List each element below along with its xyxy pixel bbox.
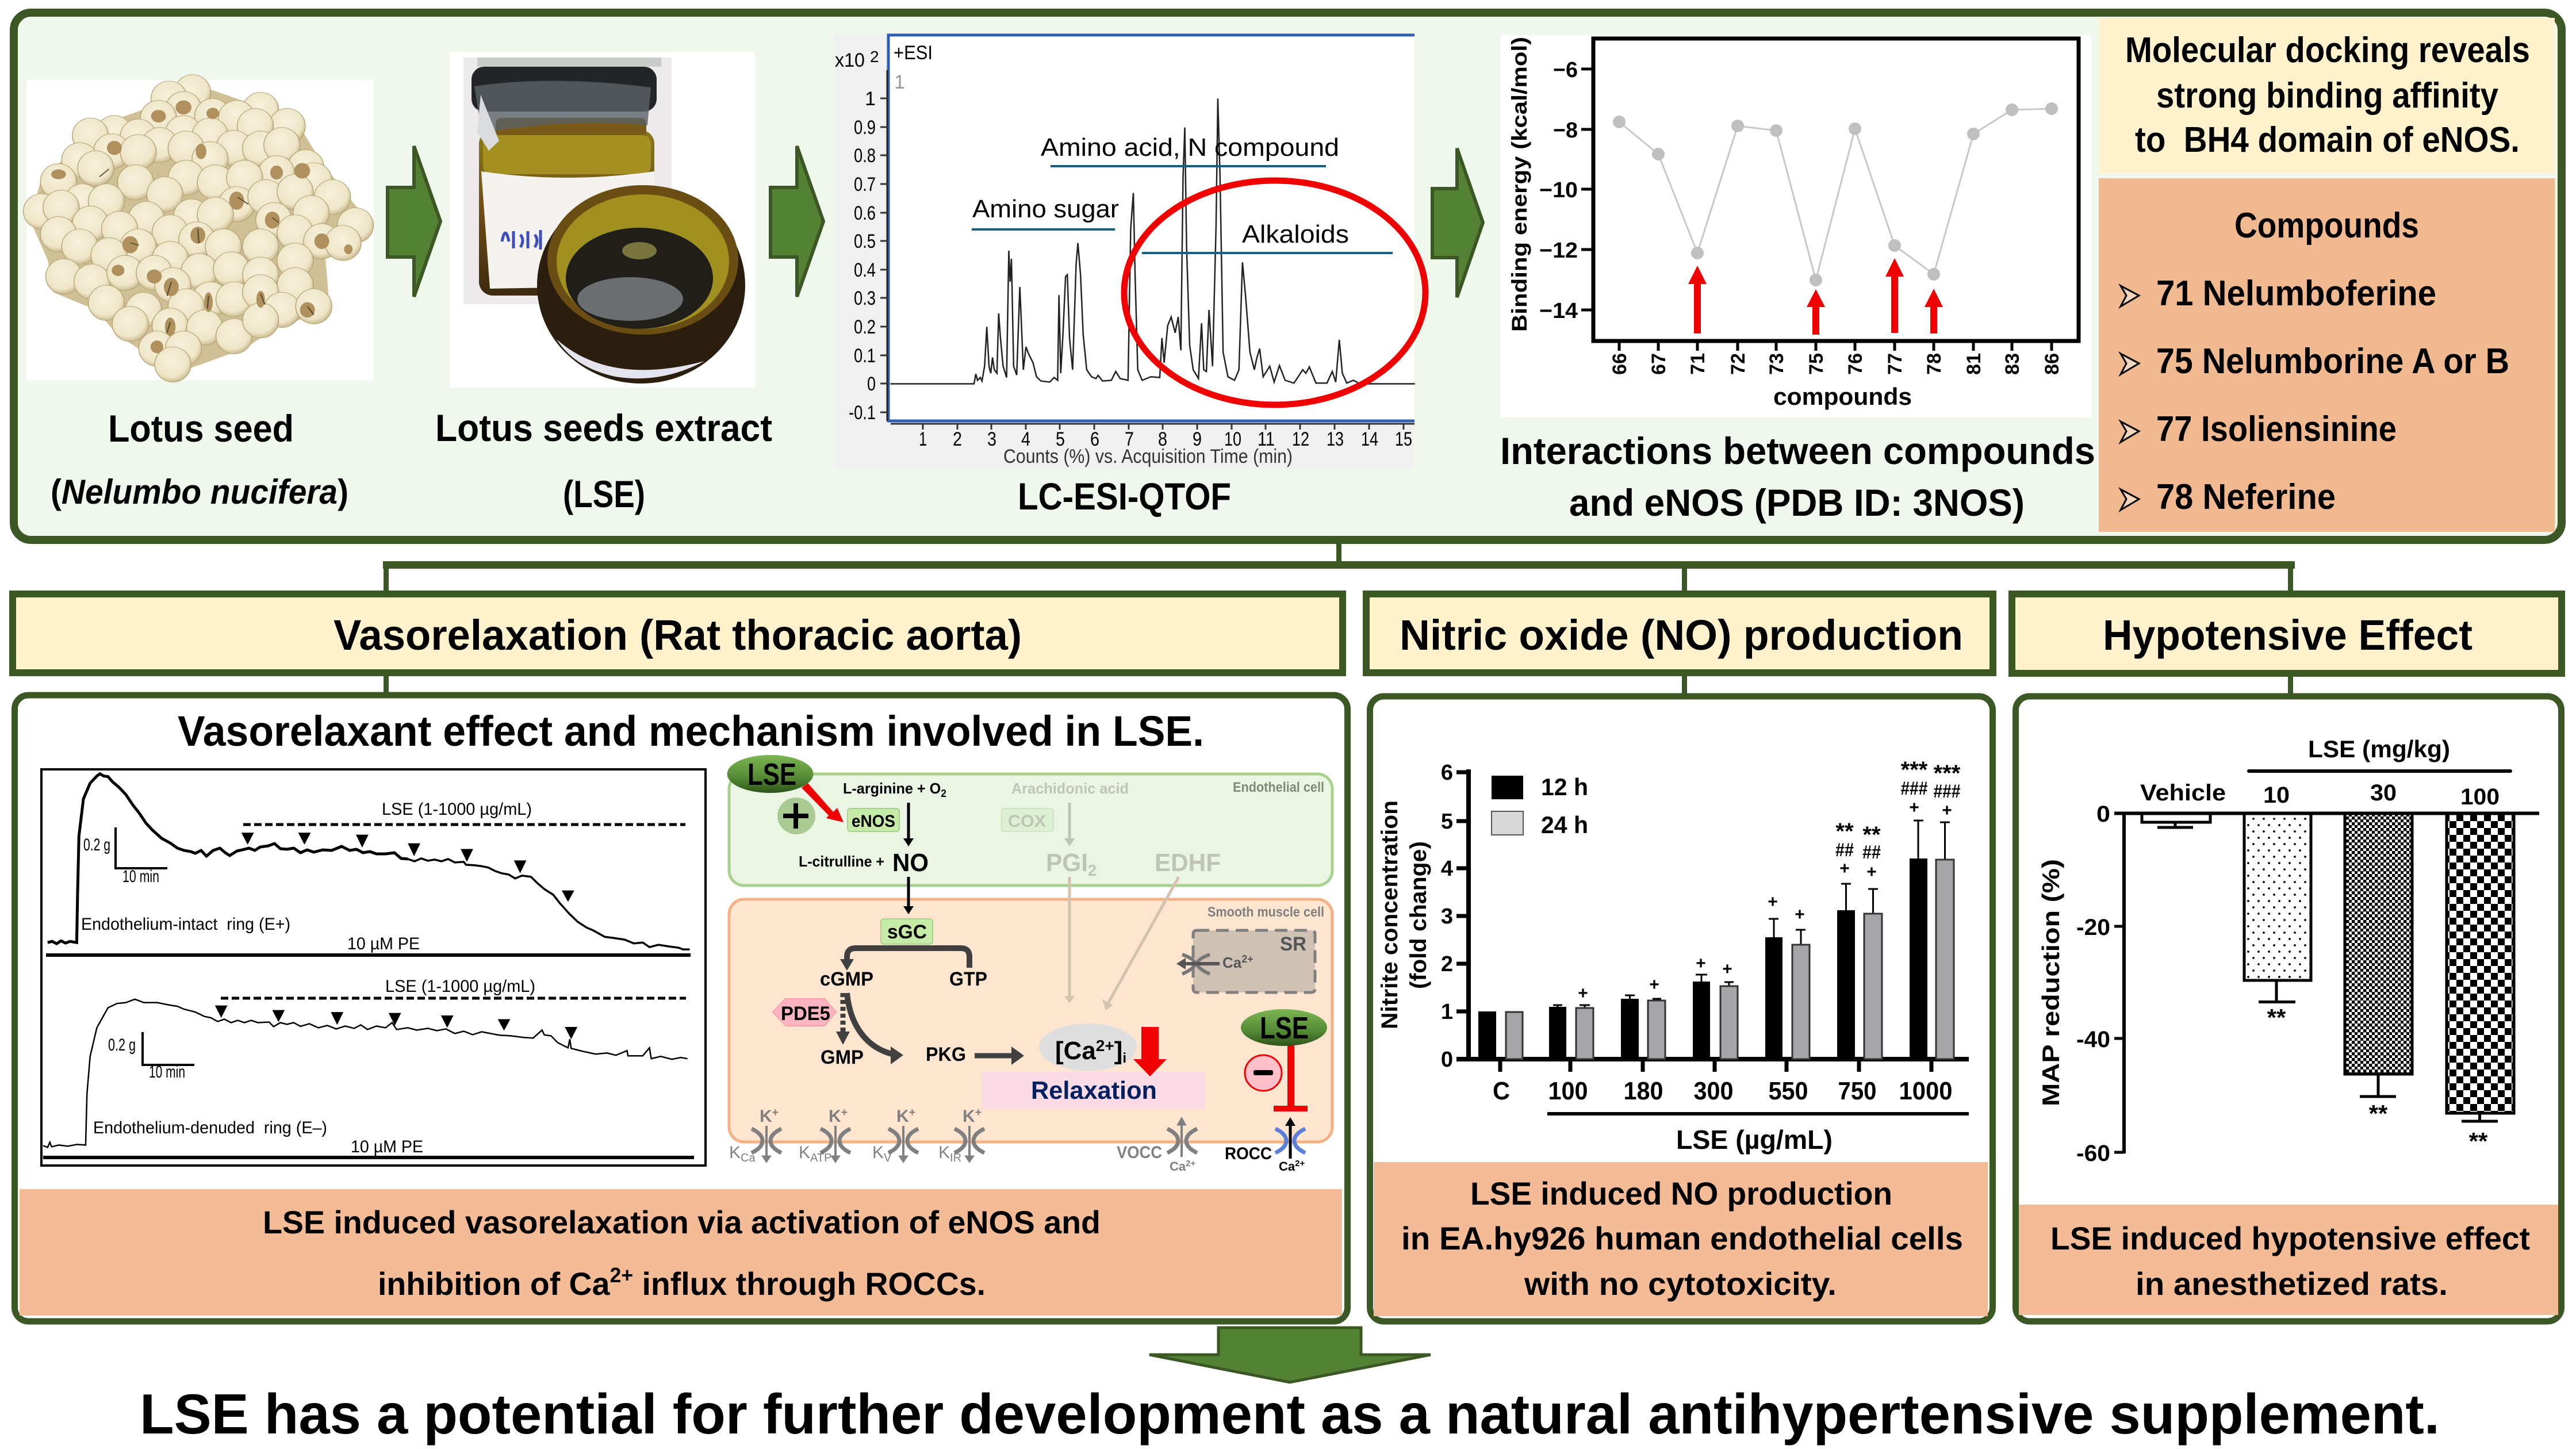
label: lotus seed: Lotus seed [108, 407, 294, 450]
chart: docking binding energy: −14 [1539, 299, 1578, 323]
chart: docking binding energy: 76 [1845, 353, 1866, 375]
heading: hypotensive effect [2012, 594, 2562, 673]
ion channels: K [896, 1107, 909, 1126]
conclusion: hypotensive effect: in anesthetized rats. [2136, 1266, 2448, 1302]
pathway: NO: L-citrulline + [799, 853, 884, 870]
chart: LC-ESI-QTOF chromatogram: 0.7 [854, 174, 876, 195]
chart: LC-ESI-QTOF chromatogram: 0.3 [854, 288, 876, 309]
chart: nitrite concentration bars: *** [1934, 761, 1961, 786]
chart: LC-ESI-QTOF chromatogram: Amino sugar [972, 195, 1119, 223]
callout: LSE activates eNOS: LSE [747, 757, 796, 792]
chart: MAP reduction bars [2037, 735, 2539, 1166]
ion channels: ATP [810, 1152, 831, 1164]
chart: LC-ESI-QTOF chromatogram: 0.6 [854, 202, 876, 224]
heading: vasorelaxation: Vasorelaxation (Rat thoracic aorta) [334, 611, 1022, 659]
chart: LC-ESI-QTOF chromatogram [835, 34, 1425, 469]
chart: tension traces [41, 769, 706, 1166]
chart: MAP reduction bars: ** [2469, 1128, 2488, 1155]
chart: nitrite concentration bars: ### [1933, 781, 1961, 802]
photo: lotus seed extract jars [450, 52, 755, 388]
arrow: conclusion [1149, 1328, 1431, 1382]
pathway: greyed prostacyclin and EDHF: PGI [1046, 849, 1090, 877]
ion channels: IR [950, 1152, 961, 1164]
chart: docking binding energy: −6 [1553, 58, 1578, 82]
pathway: greyed prostacyclin and EDHF: EDHF [1155, 849, 1221, 877]
chart: tension traces: 10 min [122, 867, 159, 886]
ion channels: + [772, 1106, 779, 1119]
chart: LC-ESI-QTOF chromatogram: Amino acid, N compound [1041, 133, 1339, 162]
ion channels [729, 1106, 1305, 1174]
chart: LC-ESI-QTOF chromatogram: 2 [953, 428, 962, 450]
ion channels: K [829, 1107, 841, 1126]
chart: nitrite concentration bars: 5 [1441, 810, 1453, 834]
heading: nitric oxide [1366, 594, 1993, 673]
diagram: mechanism of action [727, 755, 1332, 1174]
chart: docking binding energy: 77 [1884, 353, 1906, 375]
chart: nitrite concentration bars [1377, 757, 1969, 1155]
chart: MAP reduction bars: ** [2267, 1004, 2286, 1031]
callout: molecular docking: Molecular docking reveals [2125, 30, 2530, 70]
chart: docking binding energy: compounds [1773, 383, 1912, 410]
label: interactions: Interactions between compounds [1500, 430, 2095, 472]
chart: docking binding energy: −10 [1539, 178, 1578, 202]
chart: nitrite concentration bars: + [1578, 984, 1588, 1003]
chart: LC-ESI-QTOF chromatogram: 3 [987, 428, 996, 450]
pathway: NO: GTP [949, 968, 987, 990]
chart: nitrite concentration bars: 6 [1441, 761, 1453, 785]
chart: nitrite concentration bars: ### [1901, 778, 1928, 799]
panel: hypotensive results [2016, 696, 2561, 1321]
panel: compounds list: 71 Nelumboferine [2156, 274, 2436, 313]
callout: LSE activates eNOS [727, 755, 844, 834]
chart: docking binding energy: 75 [1805, 353, 1827, 375]
chart: nitrite concentration bars: 2 [1441, 952, 1453, 976]
chart: tension traces: LSE (1-1000 µg/mL) [382, 800, 532, 819]
chart: LC-ESI-QTOF chromatogram: Counts (%) vs. Acquisition Time (min) [1003, 446, 1293, 467]
panel: endothelial cell: Endothelial cell [1233, 780, 1324, 795]
callout: calcium relaxation: ] [1114, 1037, 1122, 1065]
chart: LC-ESI-QTOF chromatogram: 15 [1395, 428, 1412, 450]
chart: LC-ESI-QTOF chromatogram: 12 [1292, 428, 1309, 450]
chart: docking binding energy: 73 [1766, 353, 1788, 375]
chart: LC-ESI-QTOF chromatogram: -0.1 [849, 402, 876, 424]
pathway: NO: PDE5 [781, 1003, 830, 1025]
chart: docking binding energy: 78 [1923, 353, 1945, 375]
chart: nitrite concentration bars: + [1942, 801, 1952, 820]
conclusion: NO production: LSE induced NO production [1470, 1175, 1892, 1212]
heading: vasorelaxation [13, 594, 1343, 673]
chart: LC-ESI-QTOF chromatogram: 0.9 [854, 117, 876, 139]
chart: LC-ESI-QTOF chromatogram: x10 [835, 49, 865, 71]
chart: LC-ESI-QTOF chromatogram: 1 [894, 71, 905, 93]
chart: tension traces: Endothelium-intact ring (E+) [81, 915, 290, 934]
chart: nitrite concentration bars: 3 [1441, 904, 1453, 929]
ion channels: Ca [1279, 1159, 1295, 1174]
chart: nitrite concentration bars: + [1795, 905, 1805, 924]
pathway: NO: NO [892, 849, 929, 877]
chart: MAP reduction bars: 0 [2096, 802, 2110, 827]
chart: nitrite concentration bars: 750 [1838, 1077, 1877, 1105]
chart: LC-ESI-QTOF chromatogram: 0.1 [854, 345, 876, 367]
chart: nitrite concentration bars: + [1866, 862, 1877, 881]
callout: LSE inhibits ROCC: LSE [1260, 1011, 1309, 1045]
panel: endothelial cell [729, 774, 1332, 885]
panel: compounds list: 75 Nelumborine A or B [2156, 342, 2509, 381]
chart: docking binding energy: Binding energy (kcal/mol) [1508, 37, 1531, 332]
arrow: LC to docking [1432, 148, 1483, 297]
chart: MAP reduction bars: 30 [2370, 780, 2397, 806]
pathway: NO: sGC [887, 921, 927, 943]
conclusion: vasorelaxation: 2+ [610, 1263, 633, 1287]
chart: docking binding energy: 72 [1727, 353, 1749, 375]
conclusion: hypotensive effect [2019, 1205, 2558, 1315]
chart: LC-ESI-QTOF chromatogram: 2 [870, 48, 879, 66]
pathway: NO: GMP [821, 1046, 864, 1068]
chart: LC-ESI-QTOF chromatogram: 0 [867, 373, 876, 395]
chart: LC-ESI-QTOF chromatogram: 10 [1224, 428, 1241, 450]
ion channels: Ca [1170, 1159, 1186, 1174]
compartment: sarcoplasmic reticulum: SR [1280, 933, 1306, 955]
chart: nitrite concentration bars: 12 h [1541, 773, 1588, 800]
arrow: seed to extract [388, 146, 440, 297]
chart: LC-ESI-QTOF chromatogram: 1 [919, 428, 927, 450]
callout: calcium relaxation: [Ca [1055, 1037, 1096, 1065]
chart: docking binding energy: 81 [1963, 353, 1985, 375]
chart: docking binding energy [1500, 35, 2091, 417]
conclusion: vasorelaxation: LSE induced vasorelaxation via activation of eNOS and [263, 1204, 1101, 1240]
chart: LC-ESI-QTOF chromatogram: 9 [1193, 428, 1202, 450]
ion channels: 2+ [1186, 1159, 1195, 1168]
chart: MAP reduction bars: Vehicle [2140, 780, 2226, 806]
conclusion: vasorelaxation: influx through ROCCs. [633, 1266, 986, 1302]
heading: nitric oxide: Nitric oxide (NO) production [1400, 611, 1963, 659]
chart: nitrite concentration bars: + [1839, 859, 1850, 878]
chart: tension traces: 10 µM PE [351, 1137, 423, 1156]
pathway: NO: 2 [941, 788, 946, 799]
ion channels: V [884, 1152, 892, 1164]
chart: nitrite concentration bars: 1 [1441, 1000, 1453, 1024]
chart: MAP reduction bars: ** [2369, 1100, 2388, 1127]
label: nelumbo nucifera: (Nelumbo nucifera) [51, 473, 348, 511]
chart: LC-ESI-QTOF chromatogram: 0.5 [854, 231, 876, 252]
conclusion: vasorelaxation: inhibition of Ca [378, 1266, 612, 1302]
chart: nitrite concentration bars: ## [1835, 839, 1854, 860]
panel: vasorelaxation results [15, 695, 1348, 1321]
ion channels: K [938, 1143, 950, 1162]
chart: nitrite concentration bars: ** [1862, 822, 1881, 848]
arrow: extract to LC [770, 146, 823, 297]
ion channels: + [841, 1106, 848, 1119]
callout: calcium relaxation: i [1122, 1051, 1126, 1066]
label: eNOS PDB: and eNOS (PDB ID: 3NOS) [1569, 481, 2025, 524]
chart: tension traces: LSE (1-1000 µg/mL) [385, 977, 535, 996]
heading: hypotensive effect: Hypotensive Effect [2103, 611, 2472, 659]
callout: calcium relaxation: 2+ [1096, 1037, 1114, 1055]
chart: MAP reduction bars: 10 [2263, 783, 2290, 808]
chart: LC-ESI-QTOF chromatogram: 5 [1056, 428, 1065, 450]
chart: MAP reduction bars: MAP reduction (%) [2037, 859, 2064, 1106]
chart: MAP reduction bars: LSE (mg/kg) [2308, 735, 2450, 762]
ion channels: K [729, 1143, 741, 1162]
chart: nitrite concentration bars: (fold change) [1406, 841, 1431, 989]
chart: nitrite concentration bars: *** [1901, 757, 1928, 783]
ion channels: K [760, 1107, 772, 1126]
pathway: greyed prostacyclin and EDHF: Arachidonic acid [1011, 780, 1129, 797]
conclusion text: LSE has a potential for further development as a natural antihypertensive supplement. [140, 1382, 2440, 1446]
callout: LSE inhibits ROCC [1241, 1009, 1327, 1111]
ion channels: Ca [741, 1152, 756, 1164]
compartment: sarcoplasmic reticulum [1176, 930, 1315, 992]
pathway: NO [773, 780, 1024, 1068]
chart: docking binding energy: 71 [1687, 353, 1709, 375]
chart: LC-ESI-QTOF chromatogram: +ESI [894, 42, 933, 64]
chart: MAP reduction bars: -40 [2076, 1027, 2110, 1052]
chart: tension traces: Endothelium-denuded ring (E–) [93, 1118, 327, 1137]
chart: nitrite concentration bars: 1000 [1899, 1077, 1953, 1105]
chart: docking binding energy: 83 [2002, 353, 2023, 375]
panel: smooth muscle cell [729, 899, 1332, 1142]
pathway: greyed prostacyclin and EDHF: 2 [1088, 861, 1097, 879]
connectors: top panel to sections [383, 544, 2295, 693]
chart: tension traces: 0.2 g [83, 835, 110, 854]
chart: LC-ESI-QTOF chromatogram: 6 [1090, 428, 1099, 450]
chart: tension traces: 0.2 g [108, 1036, 136, 1055]
ion channels: K [963, 1107, 975, 1126]
callout: molecular docking: strong binding affinity [2156, 76, 2498, 116]
heading: vasorelaxant effect: Vasorelaxant effect and mechanism involved in LSE. [178, 707, 1204, 755]
callout: molecular docking: to BH4 domain of eNOS. [2135, 120, 2520, 160]
chart: LC-ESI-QTOF chromatogram: 13 [1327, 428, 1344, 450]
conclusion: NO production: in EA.hy926 human endothelial cells [1401, 1220, 1963, 1256]
chart: nitrite concentration bars: 24 h [1541, 811, 1588, 838]
conclusion: hypotensive effect: LSE induced hypotensive effect [2050, 1220, 2530, 1256]
chart: tension traces: 10 µM PE [347, 934, 420, 953]
chart: nitrite concentration bars: ** [1835, 819, 1854, 844]
chart: LC-ESI-QTOF chromatogram: 7 [1125, 428, 1134, 450]
compartment: sarcoplasmic reticulum: 2+ [1241, 953, 1254, 965]
chart: docking binding energy: 67 [1648, 353, 1670, 375]
ion channels: K [799, 1143, 810, 1162]
pathway: NO: L-arginine + O [843, 780, 944, 797]
chart: LC-ESI-QTOF chromatogram: 1 [865, 88, 876, 110]
pathway: NO: eNOS [852, 812, 895, 831]
panel: compounds list: 77 Isoliensinine [2156, 409, 2397, 449]
panel: nitric oxide results [1370, 696, 1993, 1321]
pathway: greyed prostacyclin and EDHF: COX [1008, 812, 1046, 831]
ion channels: ROCC [1225, 1144, 1272, 1163]
conclusion: vasorelaxation [20, 1189, 1342, 1316]
callout: molecular docking [2099, 18, 2555, 173]
conclusion: NO production [1374, 1162, 1988, 1316]
label: LC-ESI-QTOF: LC-ESI-QTOF [1018, 475, 1231, 518]
chart: LC-ESI-QTOF chromatogram: 11 [1258, 428, 1275, 450]
panel: extraction and analysis [14, 13, 2562, 540]
chart: LC-ESI-QTOF chromatogram: 14 [1361, 428, 1378, 450]
panel: compounds list [2099, 178, 2555, 532]
pathway: NO: cGMP [820, 968, 873, 990]
chart: LC-ESI-QTOF chromatogram: 0.4 [854, 259, 876, 281]
panel: smooth muscle cell: Smooth muscle cell [1208, 904, 1324, 920]
chart: nitrite concentration bars: ## [1862, 842, 1881, 862]
callout: calcium relaxation [982, 1023, 1205, 1109]
chart: nitrite concentration bars: + [1909, 798, 1919, 817]
chart: nitrite concentration bars: Nitrite concentration [1377, 800, 1402, 1029]
chart: docking binding energy: −12 [1539, 239, 1578, 263]
panel: compounds list: Compounds [2234, 206, 2419, 246]
label: LSE: (LSE) [563, 473, 645, 515]
callout: calcium relaxation: Relaxation [1031, 1076, 1157, 1105]
chart: nitrite concentration bars: + [1722, 960, 1732, 979]
chart: nitrite concentration bars: + [1649, 975, 1659, 994]
chart: docking binding energy: −8 [1553, 118, 1578, 143]
pathway: NO: PKG [926, 1044, 966, 1065]
chart: LC-ESI-QTOF chromatogram: 8 [1158, 428, 1167, 450]
chart: nitrite concentration bars: + [1768, 892, 1778, 911]
chart: MAP reduction bars: 100 [2460, 784, 2500, 810]
chart: LC-ESI-QTOF chromatogram: 0.8 [854, 145, 876, 167]
chart: MAP reduction bars: -60 [2076, 1141, 2110, 1166]
chart: nitrite concentration bars: 300 [1694, 1077, 1733, 1105]
chart: LC-ESI-QTOF chromatogram: 0.2 [854, 316, 876, 338]
chart: nitrite concentration bars: 4 [1441, 857, 1453, 881]
label: lotus seeds extract: Lotus seeds extract [435, 407, 772, 449]
chart: nitrite concentration bars: C [1493, 1077, 1510, 1105]
chart: nitrite concentration bars: + [1696, 954, 1706, 973]
chart: nitrite concentration bars: 0 [1441, 1048, 1453, 1072]
chart: nitrite concentration bars: LSE (µg/mL) [1676, 1125, 1833, 1155]
panel: compounds list: 78 Neferine [2156, 477, 2336, 517]
chart: MAP reduction bars: -20 [2076, 915, 2110, 940]
chart: nitrite concentration bars: 100 [1548, 1077, 1588, 1105]
ion channels: 2+ [1295, 1159, 1305, 1168]
chart: LC-ESI-QTOF chromatogram: Alkaloids [1242, 220, 1349, 248]
ion channels: K [872, 1143, 884, 1162]
conclusion: NO production: with no cytotoxicity. [1524, 1266, 1837, 1302]
ion channels: + [975, 1106, 982, 1119]
compartment: sarcoplasmic reticulum: Ca [1222, 954, 1241, 971]
ion channels: VOCC [1117, 1143, 1162, 1162]
chart: nitrite concentration bars: 180 [1624, 1077, 1663, 1105]
ion channels: + [909, 1106, 915, 1119]
pathway: greyed prostacyclin and EDHF [1002, 780, 1221, 1010]
chart: docking binding energy: 66 [1609, 353, 1631, 375]
chart: nitrite concentration bars: 550 [1769, 1077, 1808, 1105]
chart: docking binding energy: 86 [2041, 353, 2063, 375]
chart: tension traces: 10 min [149, 1063, 185, 1082]
chart: LC-ESI-QTOF chromatogram: 4 [1021, 428, 1030, 450]
photo: lotus seeds [24, 75, 374, 382]
